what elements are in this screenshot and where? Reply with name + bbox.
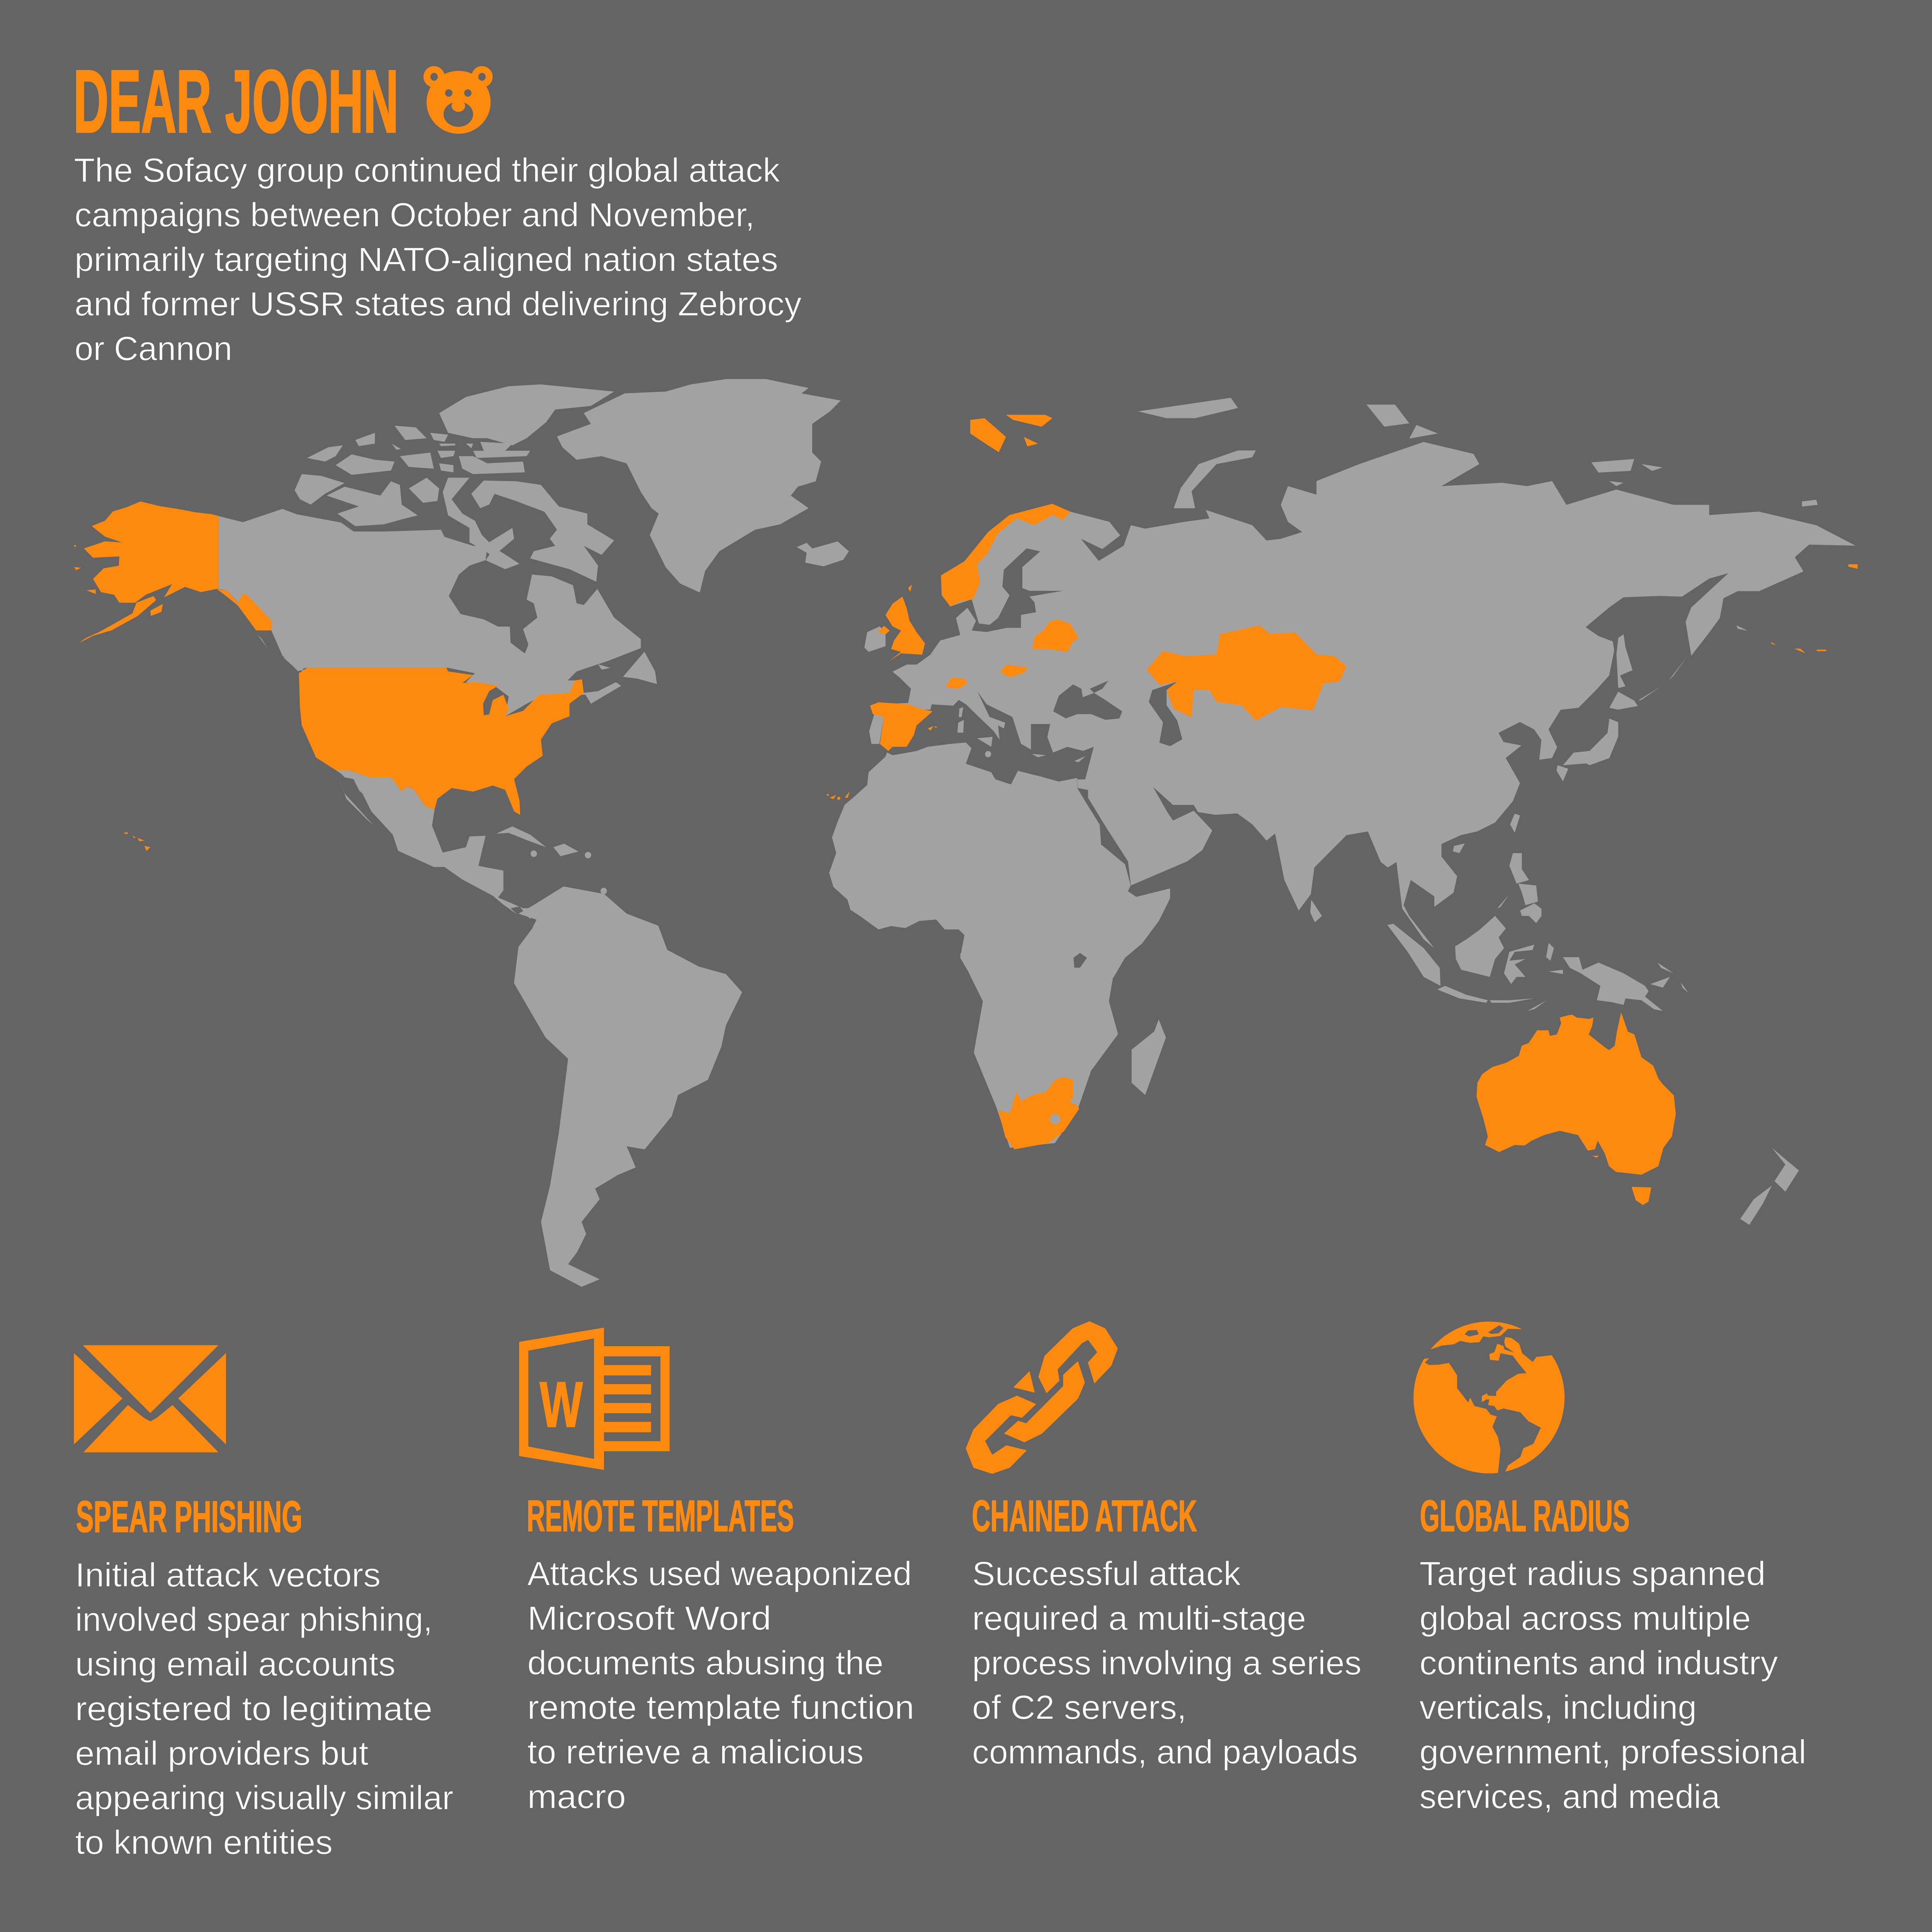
map: Mexico and Central America bbox=[336, 770, 536, 919]
map: highlighted Spain bbox=[870, 702, 938, 751]
text: spear phishing: Initial attack vectors bbox=[75, 1556, 381, 1594]
map: highlighted southern Norway bbox=[941, 533, 998, 607]
text: remote templates: to retrieve a malicious bbox=[527, 1733, 864, 1771]
column 4: global radius bbox=[1405, 1321, 1806, 1816]
map: Eurasia bbox=[874, 398, 1858, 948]
intro text: primarily targeting NATO-aligned nation states bbox=[75, 241, 778, 278]
text: chained attack: of C2 servers, bbox=[972, 1689, 1187, 1726]
column 1: spear phishing bbox=[74, 1345, 453, 1861]
map: highlighted Kazakhstan bbox=[1146, 626, 1347, 721]
text: global radius: global across multiple bbox=[1419, 1600, 1751, 1637]
title: DEAR JOOHN bbox=[73, 51, 399, 151]
map: highlighted Aleutian Islands bbox=[1770, 642, 1827, 653]
text: chained attack: Successful attack bbox=[972, 1555, 1241, 1593]
heading: global radius: GLOBAL RADIUS bbox=[1420, 1492, 1629, 1541]
text: spear phishing: using email accounts bbox=[75, 1645, 396, 1683]
text: chained attack: commands, and payloads bbox=[972, 1733, 1358, 1771]
intro text: The Sofacy group continued their global attack bbox=[74, 151, 780, 189]
map: highlighted South Africa bbox=[998, 1077, 1079, 1149]
icon: envelope bbox=[74, 1345, 226, 1452]
map: Sea of Azov bbox=[1090, 681, 1108, 693]
intro text: or Cannon bbox=[75, 330, 232, 367]
text: remote templates: remote template function bbox=[527, 1689, 914, 1726]
map: highlighted Alaska and Hawaii bbox=[74, 502, 272, 851]
text: remote templates: Attacks used weaponized bbox=[527, 1555, 912, 1593]
map: highlighted Commander Islands bbox=[1849, 564, 1858, 569]
text: global radius bbox=[1419, 1555, 1806, 1816]
map: North America and Greenland bbox=[219, 379, 841, 919]
text: global radius: services, and media bbox=[1419, 1778, 1720, 1816]
column 2: remote templates bbox=[519, 1328, 914, 1816]
text: global radius: verticals, including bbox=[1419, 1689, 1697, 1726]
map: highlighted northern Norway bbox=[964, 504, 1070, 573]
text: spear phishing: email providers but bbox=[75, 1735, 368, 1772]
icon: Word document: W bbox=[540, 1369, 583, 1440]
map: highlighted Canary Islands bbox=[827, 791, 850, 800]
text: remote templates bbox=[527, 1555, 914, 1816]
text: global radius: government, professional bbox=[1419, 1733, 1806, 1771]
icon: chain links bbox=[966, 1321, 1117, 1473]
text: chained attack: required a multi-stage bbox=[972, 1600, 1306, 1637]
icon: globe bbox=[1405, 1321, 1569, 1477]
map: highlighted Switzerland bbox=[946, 677, 968, 689]
intro text: campaigns between October and November, bbox=[75, 196, 755, 234]
heading: chained attack: CHAINED ATTACK bbox=[972, 1492, 1197, 1541]
map: highlighted Australia bbox=[1476, 1012, 1676, 1205]
text: global radius: Target radius spanned bbox=[1419, 1555, 1766, 1593]
intro text bbox=[74, 151, 802, 367]
map: highlighted Slovakia bbox=[1000, 665, 1028, 677]
text: spear phishing: appearing visually similar bbox=[75, 1779, 453, 1817]
text: remote templates: macro bbox=[527, 1778, 626, 1816]
icon: bear bbox=[423, 66, 493, 134]
intro text: and former USSR states and delivering Zebrocy bbox=[75, 285, 802, 323]
map: highlighted Belarus bbox=[1032, 619, 1078, 652]
map: highlighted Svalbard bbox=[970, 415, 1052, 452]
map: Europe and northern Africa detail bbox=[797, 533, 1170, 986]
text: spear phishing: to known entities bbox=[75, 1824, 333, 1861]
map: East Asia islands bbox=[1310, 625, 1827, 1011]
text: spear phishing: involved spear phishing, bbox=[75, 1601, 432, 1638]
map: southern Africa landmass bbox=[960, 954, 1118, 1148]
map: Black Sea bbox=[1053, 684, 1122, 720]
map: highlighted USA bbox=[299, 668, 584, 815]
map: Lake Victoria bbox=[1073, 953, 1087, 968]
text: global radius: continents and industry bbox=[1419, 1644, 1778, 1682]
heading: remote templates: REMOTE TEMPLATES bbox=[527, 1492, 794, 1541]
map: Caspian Sea bbox=[1149, 682, 1182, 746]
map: highlighted United Kingdom bbox=[877, 585, 925, 662]
text: remote templates: documents abusing the bbox=[527, 1644, 883, 1682]
world map bbox=[74, 379, 1858, 1287]
heading: spear phishing: SPEAR PHISHING bbox=[76, 1492, 303, 1542]
text: spear phishing: registered to legitimate bbox=[75, 1690, 432, 1728]
text: chained attack bbox=[972, 1555, 1362, 1771]
text: chained attack: process involving a series bbox=[972, 1644, 1362, 1682]
map: South America, Madagascar, New Zealand, South Africa bbox=[514, 886, 1799, 1287]
icon: Word document bbox=[519, 1328, 670, 1470]
column 3: chained attack bbox=[966, 1321, 1362, 1771]
text: spear phishing bbox=[75, 1556, 453, 1861]
text: remote templates: Microsoft Word bbox=[527, 1600, 771, 1637]
